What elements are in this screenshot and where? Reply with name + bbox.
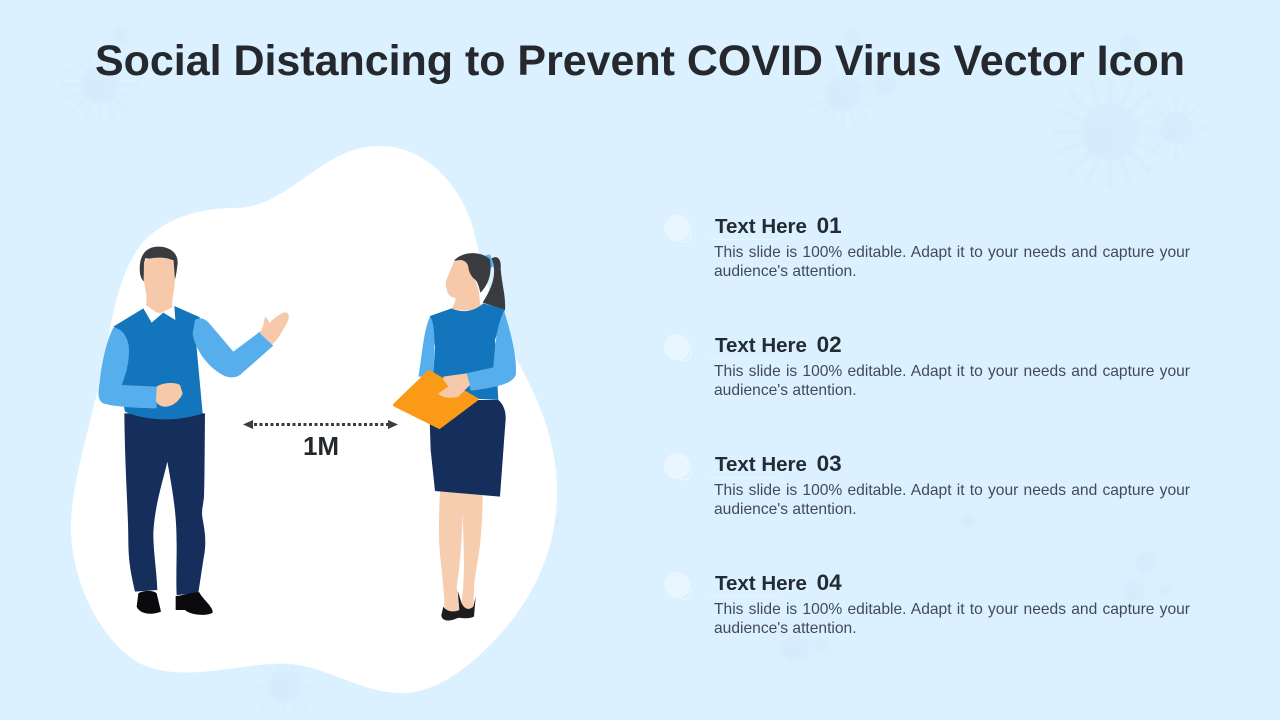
bullet icon 04: [664, 572, 780, 600]
heading 03: Text Here 03: [715, 451, 842, 476]
man upper body: [99, 247, 289, 419]
heading 02: Text Here 02: [715, 332, 842, 357]
description 02: This slide is 100% editable. Adapt it to your needs and capture your audience's attention.: [714, 363, 1190, 399]
man shoes: [137, 591, 213, 615]
bullet icon 03: [664, 453, 780, 480]
list item 02: [664, 332, 1190, 399]
woman legs: [439, 492, 483, 612]
distance label: 1M: [303, 431, 339, 461]
woman figure: [395, 253, 516, 621]
woman skirt: [429, 400, 506, 497]
heading 01: Text Here 01: [715, 213, 842, 238]
man figure: [99, 247, 289, 615]
list item 03: [664, 451, 1190, 518]
woman shoes: [441, 591, 476, 621]
bullet icon 02: [664, 334, 780, 362]
woman upper body: [395, 253, 516, 427]
distance arrow: [243, 420, 398, 429]
list item 01: [664, 213, 1190, 280]
list item 04: [664, 570, 1190, 637]
description 04: This slide is 100% editable. Adapt it to your needs and capture your audience's attention.: [714, 601, 1190, 637]
heading 04: Text Here 04: [715, 570, 842, 595]
title: Social Distancing to Prevent COVID Virus Vector Icon: [95, 37, 1185, 85]
bullet icon 01: [664, 215, 780, 242]
description 01: This slide is 100% editable. Adapt it to your needs and capture your audience's attention.: [714, 244, 1190, 280]
white blob background: [71, 146, 557, 693]
man trousers: [124, 413, 205, 595]
description 03: This slide is 100% editable. Adapt it to your needs and capture your audience's attention.: [714, 482, 1190, 518]
